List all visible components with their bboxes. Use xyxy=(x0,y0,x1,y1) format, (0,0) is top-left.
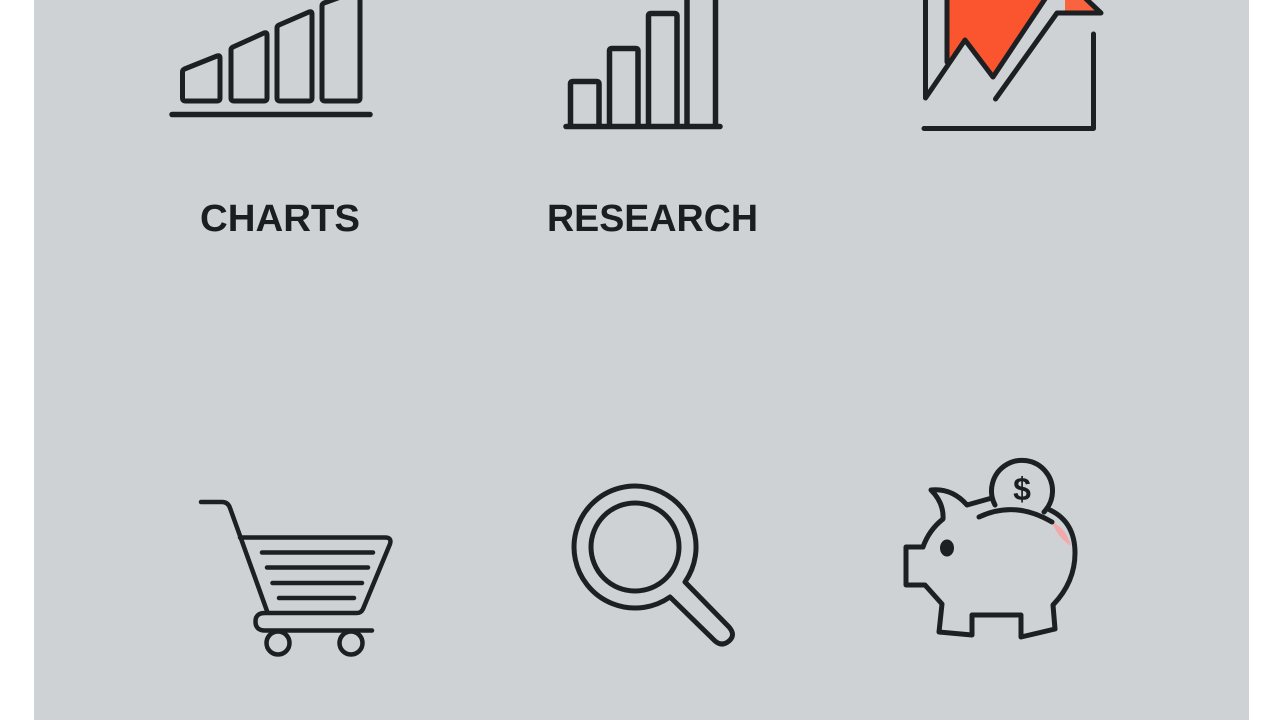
red area xyxy=(947,0,1047,77)
red arrow tip xyxy=(1065,0,1097,12)
icon: magnifying glass xyxy=(574,486,732,644)
icon: shopping cart xyxy=(201,502,390,654)
blush xyxy=(1052,522,1071,546)
back line xyxy=(979,510,1052,522)
icon: charts bar graph xyxy=(172,0,370,114)
icon: red trend chart xyxy=(924,0,1101,128)
arrow line xyxy=(996,0,1101,99)
icon: piggy bank with coin xyxy=(906,460,1075,637)
axis xyxy=(924,34,1094,128)
eye xyxy=(940,540,954,556)
heading: research label: RESEARCH xyxy=(547,198,758,240)
coin xyxy=(992,460,1053,512)
pig body xyxy=(906,490,1075,637)
trend lines xyxy=(926,0,1047,98)
heading: charts label: CHARTS xyxy=(200,198,360,240)
dollar sign: $ xyxy=(1013,471,1031,507)
icon: research bar graph xyxy=(566,0,720,126)
